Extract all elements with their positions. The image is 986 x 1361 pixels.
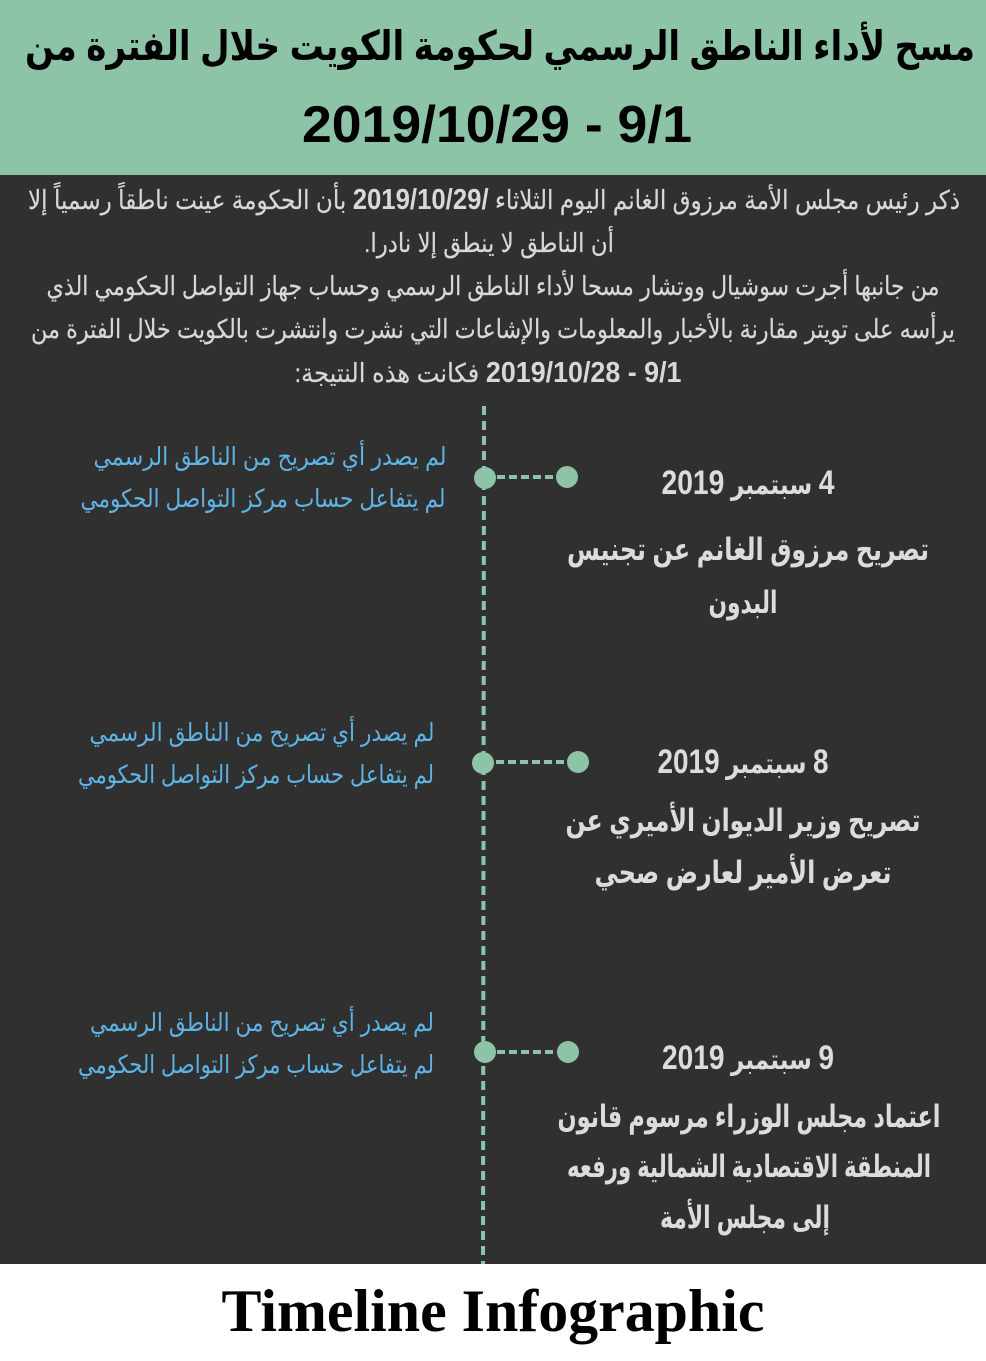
timeline vertical dashed line: [483, 406, 484, 1264]
event: [567, 532, 929, 621]
left note: [78, 715, 434, 790]
panel: title header: [0, 0, 986, 175]
left note: لم يصدر أي تصريح من الناطق الرسمي: [94, 439, 446, 472]
intro text block: 9/1 - 2019/10/28 فكانت هذه النتيجة:: [294, 357, 682, 389]
event: [566, 801, 920, 891]
connector and dots: [474, 1041, 579, 1063]
intro text block: [28, 181, 960, 389]
intro text block: أن الناطق لا ينطق إلا نادرا.: [364, 225, 614, 259]
event: البدون: [708, 585, 778, 621]
title line 2: date range: 9/1 - 2019/10/29: [302, 96, 692, 154]
event: تعرض الأمير لعارض صحي: [594, 853, 892, 891]
footer label: Timeline Infographic: [222, 1278, 764, 1344]
event: [558, 1099, 940, 1236]
connector and dots: [474, 466, 578, 489]
timeline entry: 4 September: [80, 439, 929, 621]
left note: لم يصدر أي تصريح من الناطق الرسمي: [90, 715, 434, 748]
timeline entry: 9 September: [78, 1005, 940, 1236]
date: 9 سبتمبر 2019: [662, 1039, 834, 1077]
left note: لم يصدر أي تصريح من الناطق الرسمي: [90, 1005, 434, 1038]
left note: لم يتفاعل حساب مركز التواصل الحكومي: [80, 485, 446, 514]
date: 4 سبتمبر 2019: [662, 464, 835, 502]
left note: [78, 1005, 434, 1080]
left note: [80, 439, 446, 514]
left note: لم يتفاعل حساب مركز التواصل الحكومي: [78, 1051, 434, 1080]
left note: لم يتفاعل حساب مركز التواصل الحكومي: [78, 761, 434, 790]
date: 8 سبتمبر 2019: [658, 743, 828, 781]
connector and dots: [472, 751, 589, 774]
event: إلى مجلس الأمة: [660, 1198, 830, 1236]
timeline entry: 8 September: [78, 715, 920, 891]
